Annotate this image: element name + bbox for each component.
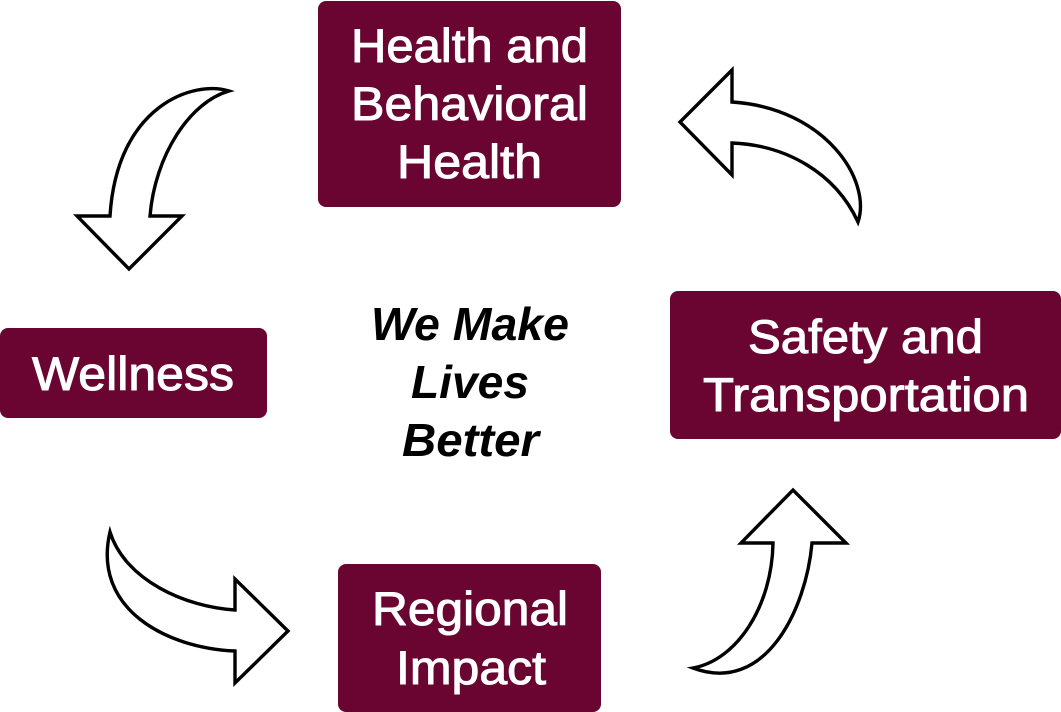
center text: We Make Lives Better: Better [402, 414, 541, 466]
arrow: Regional Impact to Safety [693, 490, 846, 673]
panel: Health and Behavioral Health: Health and [351, 19, 588, 72]
panel: Health and Behavioral Health: Health [397, 135, 542, 188]
panel: Regional Impact [338, 564, 601, 712]
panel: Safety and Transportation: Transportation [703, 368, 1029, 421]
center text: We Make Lives Better [371, 298, 569, 466]
panel: Health and Behavioral Health: Behavioral [351, 77, 588, 130]
panel: Wellness: Wellness [32, 347, 234, 400]
panel: Safety and Transportation [670, 291, 1061, 439]
panel: Safety and Transportation: Safety and [748, 310, 983, 363]
arrow: Safety to Health [680, 70, 860, 222]
panel: Regional Impact: Regional [372, 582, 568, 635]
center text: We Make Lives Better: We Make [371, 298, 569, 350]
panel: Wellness [0, 328, 267, 418]
arrow: Health to Wellness [77, 89, 229, 269]
center text: We Make Lives Better: Lives [411, 356, 529, 408]
panel: Regional Impact: Impact [396, 641, 546, 694]
arrow: Wellness to Regional Impact [107, 532, 288, 683]
panel: Health and Behavioral Health [318, 1, 621, 207]
